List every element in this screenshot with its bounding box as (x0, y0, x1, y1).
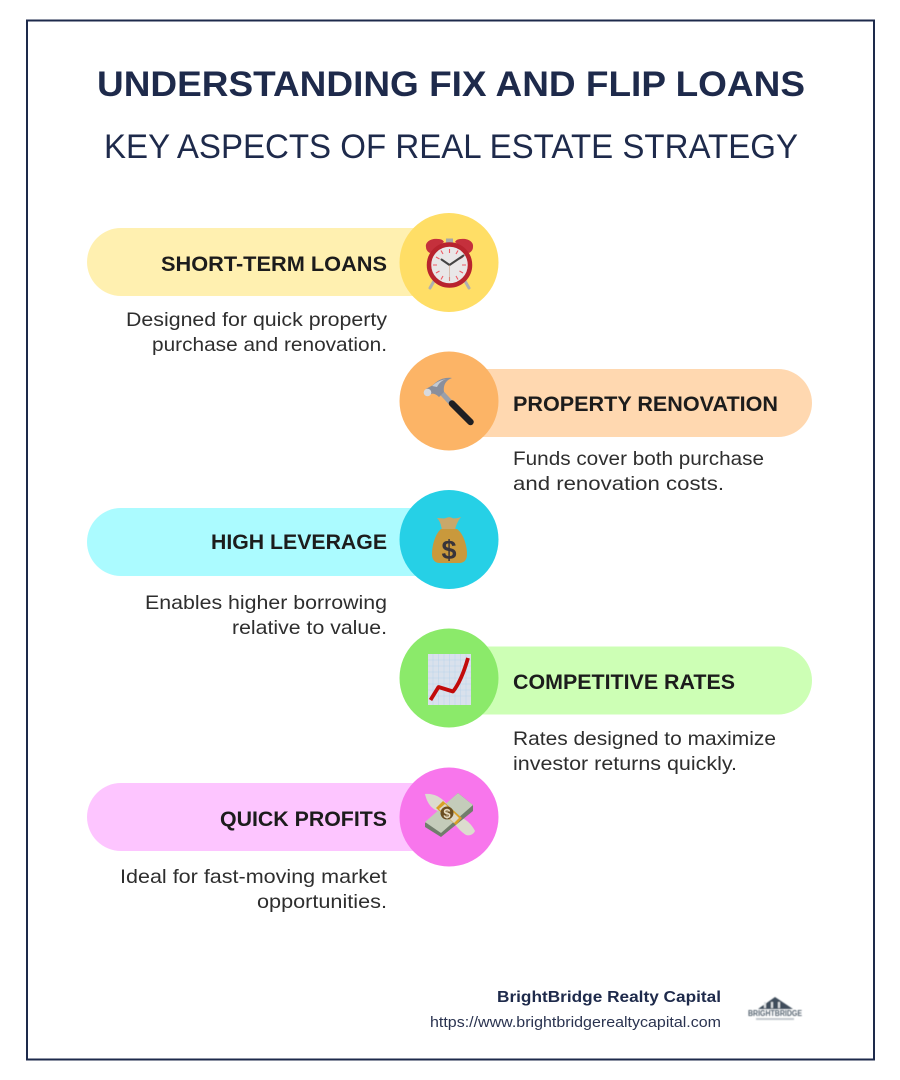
icon circle: green (400, 628, 498, 728)
icon: hammer (424, 378, 470, 422)
title: UNDERSTANDING FIX AND FLIP LOANS (97, 65, 805, 104)
pill: quick profits (87, 783, 430, 851)
icon: chart increasing (428, 654, 471, 705)
company logo: BRIGHTBRIDGE (748, 1009, 803, 1018)
panel: short-term loans (87, 213, 499, 356)
icon: money bag (432, 517, 467, 565)
icon: money with wings: $ (443, 806, 451, 821)
gold strap (436, 801, 462, 825)
description: property renovation: Funds cover both purchase (513, 448, 764, 470)
description: competitive rates: Rates designed to maximize (513, 728, 776, 750)
description: short-term loans: purchase and renovation. (152, 334, 387, 356)
description: short-term loans: Designed for quick property (126, 309, 387, 331)
panel: high leverage (87, 490, 498, 639)
pill: competitive rates (470, 646, 812, 714)
icon: money bag: $ (441, 535, 457, 565)
icon circle: pink (400, 768, 498, 866)
description: property renovation: and renovation costs. (513, 473, 724, 495)
description: high leverage (145, 592, 387, 639)
panel: property renovation (400, 352, 812, 495)
description: quick profits: opportunities. (257, 891, 387, 913)
heading: property renovation: PROPERTY RENOVATION (513, 392, 778, 416)
description: high leverage: relative to value. (232, 617, 387, 639)
description: short-term loans (126, 309, 387, 356)
panel: competitive rates (400, 628, 812, 775)
icon circle: orange (400, 352, 498, 450)
heading: quick profits: QUICK PROFITS (220, 807, 387, 831)
pill: high leverage (87, 508, 430, 576)
subtitle: KEY ASPECTS OF REAL ESTATE STRATEGY (104, 128, 798, 166)
description: quick profits (120, 866, 388, 913)
icon: alarm clock (426, 238, 473, 288)
description: competitive rates: investor returns quickly. (513, 753, 737, 775)
pill: short-term loans (87, 228, 430, 296)
company logo (748, 997, 803, 1020)
panel: quick profits (87, 768, 498, 913)
heading: high leverage: HIGH LEVERAGE (211, 530, 387, 554)
description: quick profits: Ideal for fast-moving market (120, 866, 388, 888)
icon: money with wings (425, 793, 475, 837)
heading: short-term loans: SHORT-TERM LOANS (161, 252, 387, 276)
lower wing (453, 817, 475, 835)
pill: property renovation (470, 369, 812, 437)
footer website url: https://www.brightbridgerealtycapital.com (430, 1015, 721, 1031)
icon circle: cyan (400, 490, 498, 589)
description: high leverage: Enables higher borrowing (145, 592, 387, 614)
heading: competitive rates: COMPETITIVE RATES (513, 670, 735, 694)
footer company name: BrightBridge Realty Capital (497, 989, 721, 1006)
banknotes (425, 793, 473, 837)
description: competitive rates (513, 728, 776, 775)
icon circle: yellow (400, 213, 498, 312)
description: property renovation (513, 448, 764, 495)
upper wing (425, 794, 446, 811)
